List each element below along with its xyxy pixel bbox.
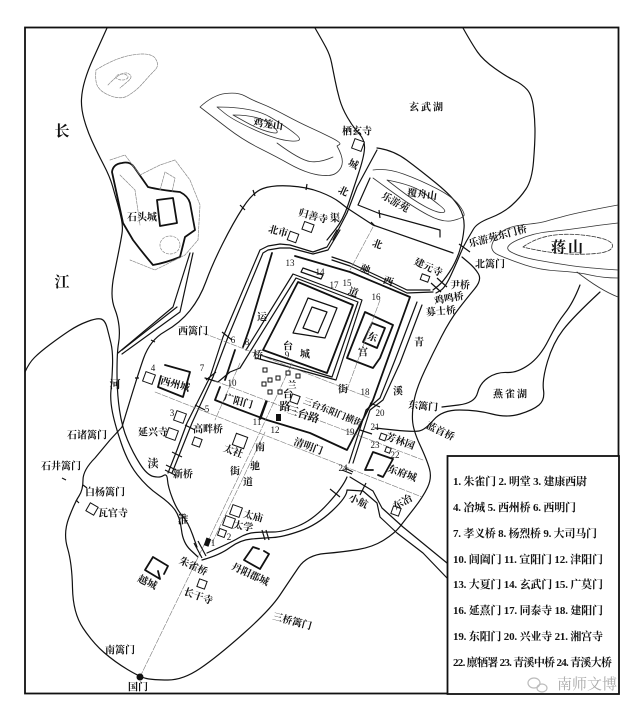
labels: city interior: 路 <box>280 399 290 413</box>
labels: numbers: 19 <box>346 427 355 437</box>
Dongfu city <box>365 452 393 477</box>
Shitou city <box>112 162 195 265</box>
labels: south: 太社 <box>222 442 245 461</box>
labels: west: 淮 <box>178 512 188 526</box>
labels: numbers: 8 <box>245 337 250 347</box>
Eastern palace <box>347 312 393 368</box>
Danyang city <box>244 547 269 569</box>
labels: numbers: 5 <box>205 404 210 414</box>
labels: city interior: 三台东阳门横街 <box>302 395 364 428</box>
northwest hill contours <box>96 54 158 98</box>
labels: numbers: 9 <box>285 350 290 360</box>
labels: city interior: 三台路 <box>285 402 321 426</box>
legend text: 19. 东阳门 20. 兴业寺 21. 湘宫寺 <box>453 629 603 643</box>
Leyou garden wall <box>358 178 440 237</box>
Xuanwu lake shore <box>315 28 535 293</box>
labels: numbers: 3 <box>170 408 175 418</box>
labels: hills and lakes north: 栖玄寺 <box>342 124 372 138</box>
labels: numbers: 18 <box>360 387 370 397</box>
labels: numbers: 13 <box>286 258 295 268</box>
labels: numbers: 4 <box>151 363 156 373</box>
labels: hills and lakes north: 城 <box>346 156 361 172</box>
labels: hills and lakes north: 玄武湖 <box>409 100 445 114</box>
labels: northeast: 建元寺 <box>412 255 445 279</box>
Qinhuai branch canals <box>202 477 447 578</box>
labels: city interior: 运 <box>257 312 268 324</box>
labels: numbers: 1 <box>211 538 215 548</box>
labels: numbers: 21 <box>370 422 380 432</box>
legend text: 4. 冶城 5. 西州桥 6. 西明门 <box>453 500 576 514</box>
labels: hills and lakes north: 鸡笼山 <box>252 115 284 133</box>
legend text: 22. 廪牺署 23. 青溪中桥 24. 青溪大桥 <box>453 655 612 669</box>
labels: southeast: 小航 <box>347 491 370 511</box>
labels: numbers: 10 <box>228 378 237 388</box>
labels: city interior <box>222 237 395 457</box>
Jiankang city wall <box>215 253 410 450</box>
labels: northeast <box>393 222 585 400</box>
Fuzhou hill contours <box>373 170 464 221</box>
canals: Yundu and Chaogou double lines <box>168 230 433 473</box>
labels: numbers: 2 <box>227 532 231 542</box>
labels: south: 丹阳郡城 <box>230 560 271 588</box>
labels: hills and lakes north: 覆舟山 <box>406 185 438 203</box>
labels: west: 渎 <box>148 456 160 470</box>
labels: hills and lakes north <box>252 100 445 240</box>
labels: south: 太庙 <box>242 507 265 525</box>
labels: numbers: 24 <box>338 463 348 473</box>
labels: west <box>41 210 223 526</box>
small building squares <box>86 139 430 589</box>
labels: hills and lakes north: 乐游苑 <box>379 189 412 215</box>
labels: west: 石诸篱门 <box>67 428 107 442</box>
outer wall <box>66 186 480 680</box>
labels: northeast: 募士桥 <box>425 303 456 319</box>
labels: northeast: 北篱门 <box>475 258 505 270</box>
labels: west: 石头城 <box>127 210 157 224</box>
Qingxi stream <box>349 302 422 463</box>
legend panel <box>448 456 619 694</box>
labels: southeast: 芳林园 <box>384 430 417 452</box>
legend text: 16. 延熹门 17. 同泰寺 18. 建阳门 <box>453 603 603 617</box>
labels: city interior: 街 <box>338 382 348 396</box>
labels: numbers: 17 <box>330 280 339 290</box>
labels: numbers: 14 <box>316 267 325 277</box>
labels: northeast: 蒋山 <box>551 238 585 256</box>
Yanque lake <box>375 285 600 431</box>
Yue city <box>145 557 168 579</box>
labels: 江 <box>54 274 70 291</box>
Taicheng palace <box>263 282 353 373</box>
Yangtze river bank <box>25 28 198 557</box>
watermark <box>528 675 617 693</box>
labels: south: 街 <box>230 464 240 478</box>
labels: south: 道 <box>243 476 253 488</box>
labels: northeast: 鸡鸣桥 <box>433 289 465 307</box>
labels: northeast: 青 <box>414 336 424 348</box>
labels: southeast: 东篱门 <box>408 398 439 414</box>
labels: hills and lakes north: 北市 <box>267 223 289 240</box>
gate dot marks <box>136 400 281 680</box>
Daxia gate enclosure <box>301 268 323 279</box>
labels: hills and lakes north: 渠 <box>330 212 340 224</box>
labels: city interior: 西 <box>381 273 395 289</box>
labels: city interior: 道 <box>346 284 360 300</box>
Jishan hill (鸡笼山) contours <box>200 93 342 176</box>
watermark: 南师文博 <box>557 675 617 693</box>
labels: northeast: 溪 <box>393 384 403 398</box>
labels: numbers: 16 <box>372 292 381 302</box>
labels: south: 国门 <box>128 680 148 694</box>
labels: numbers: 22 <box>390 450 400 460</box>
labels: south: 三桥篱门 <box>271 610 313 632</box>
Jiang hill contours <box>492 205 618 297</box>
labels: west: 西篱门 <box>178 324 208 338</box>
labels: southeast: 东府城 <box>386 462 419 484</box>
labels: numbers: 7 <box>200 363 205 373</box>
labels: numbers: 15 <box>342 278 352 288</box>
bridge and gate ticks <box>62 184 470 558</box>
labels: west: 河 <box>110 378 120 391</box>
legend text: 13. 大夏门 14. 玄武门 15. 广莫门 <box>453 577 603 591</box>
labels: southeast: 东冶 <box>391 491 415 513</box>
labels: south: 南篱门 <box>105 644 135 656</box>
labels: numbers: 12 <box>270 425 280 435</box>
legend text: 1. 朱雀门 2. 明堂 3. 建康西尉 <box>453 474 587 488</box>
labels: south: 南 <box>255 440 265 454</box>
labels: south: 朱雀桥 <box>177 554 210 578</box>
Shitou hill contours <box>110 155 200 270</box>
labels: numbers: 23 <box>370 440 380 450</box>
roads thin lines <box>140 227 423 677</box>
labels: hills and lakes north: 北 <box>336 184 350 199</box>
labels: numbers: 6 <box>231 335 236 345</box>
labels: southeast: 蓝首桥 <box>424 419 457 443</box>
legend text: 10. 阊阖门 11. 宣阳门 12. 津阳门 <box>453 552 603 566</box>
labels: west: 西州城 <box>159 374 191 394</box>
labels: hills and lakes north: 归善寺 <box>297 206 329 226</box>
labels: city interior: 东 <box>365 329 380 345</box>
labels: city interior: 兰 <box>287 379 297 390</box>
label: Yangtze 长江: 长 <box>54 123 70 140</box>
labels: northeast: 燕雀湖 <box>493 388 529 400</box>
labels: numbers: 11 <box>253 417 261 427</box>
legend text: 7. 孝义桥 8. 杨烈桥 9. 大司马门 <box>453 526 597 540</box>
labels: city interior: 台 <box>283 388 294 400</box>
labels: city interior: 宫 <box>358 346 368 358</box>
labels: south <box>105 440 313 694</box>
labels: west: 新桥 <box>173 468 193 480</box>
labels: south: 驰 <box>250 460 260 472</box>
labels: west: 高畔桥 <box>193 422 223 436</box>
labels: city interior: 驰 <box>358 261 372 277</box>
labels: southeast <box>347 398 457 513</box>
labels: northeast: 乐游苑东门桥 <box>467 222 528 250</box>
labels: numbers <box>151 258 400 548</box>
labels: city interior: 桥 <box>253 348 263 362</box>
labels <box>41 100 585 694</box>
legend text <box>453 474 612 669</box>
labels: south: 越城 <box>136 572 159 592</box>
labels: west: 瓦官寺 <box>98 506 128 520</box>
labels: west: 白杨篱门 <box>85 486 125 498</box>
Taicheng outer moat <box>240 274 362 380</box>
labels: west: 石井篱门 <box>41 460 81 472</box>
labels: city interior: 广阳门 <box>222 391 254 411</box>
labels: city interior: 台 <box>283 340 294 352</box>
labels: city interior: 城 <box>300 348 310 360</box>
labels: city interior: 清明门 <box>292 435 325 457</box>
Xizhou city <box>158 365 190 397</box>
labels: northeast: 尹桥 <box>450 278 470 292</box>
labels: numbers: 20 <box>376 408 385 418</box>
labels: south: 长干寺 <box>182 585 215 607</box>
labels: city interior: 北 <box>370 237 384 252</box>
labels: south: 太学 <box>232 518 254 534</box>
labels: west: 延兴寺 <box>138 426 168 438</box>
